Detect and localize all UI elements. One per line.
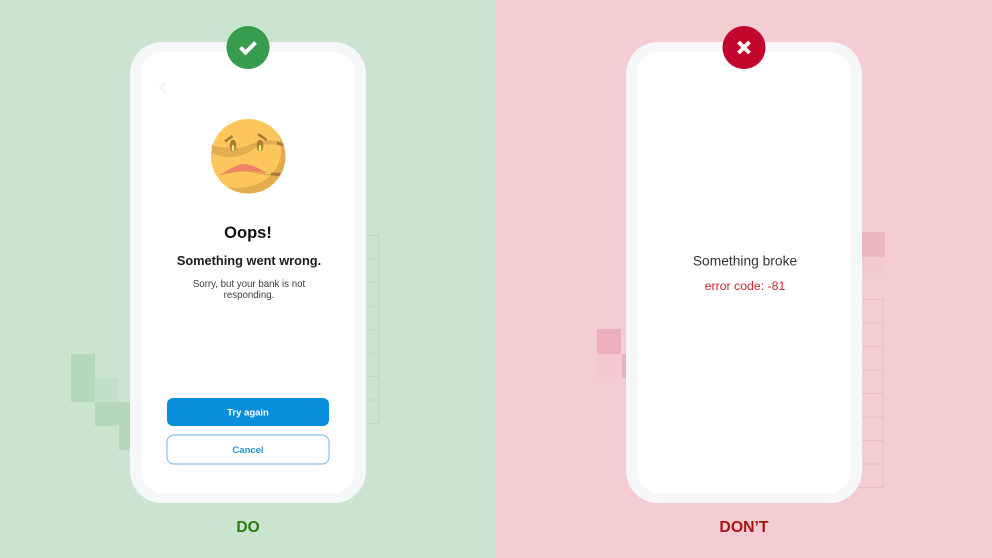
button: try again: Try again (227, 408, 269, 418)
body text: responding. (224, 290, 274, 301)
icon: back chevron (160, 82, 166, 93)
panel: dont (496, 0, 992, 558)
label: dont: DON’T (719, 519, 769, 536)
button: try again (167, 398, 329, 426)
button: cancel: Cancel (232, 445, 264, 456)
decorative grid: do (360, 236, 379, 424)
phone: dont (626, 42, 862, 503)
message: Something broke (693, 254, 797, 268)
error code: error code: -81 (705, 279, 785, 293)
decorative pixel squares: do (71, 354, 130, 450)
subheading: Something went wrong. (177, 253, 321, 268)
badge: check (226, 26, 270, 69)
label: do: DO (236, 519, 260, 536)
phone: do (130, 42, 366, 503)
heading: oops: Oops! (224, 224, 272, 242)
body text: Sorry, but your bank is not (193, 279, 305, 290)
badge: cross (722, 26, 766, 69)
button: cancel (167, 435, 329, 464)
panel: do (0, 0, 496, 558)
decorative grid: dont (856, 300, 883, 488)
decorative pixel squares: dont (597, 232, 885, 378)
illustration: sad emoji (211, 119, 286, 194)
